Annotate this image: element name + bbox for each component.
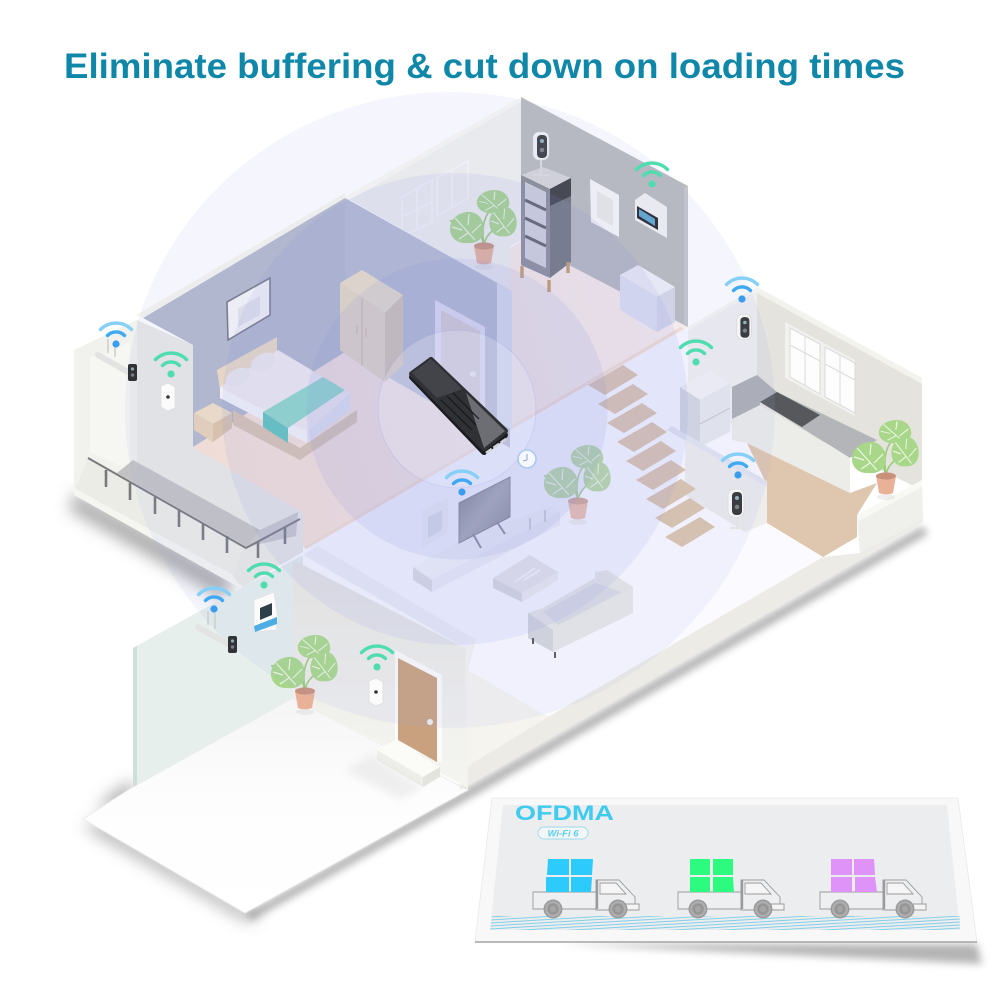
truck green: [678, 859, 784, 918]
outdoor camera left: [98, 339, 137, 381]
wifi adapter dongle: [412, 359, 506, 453]
wifi green left: [156, 353, 186, 378]
bed: [217, 337, 357, 460]
door step: [377, 740, 440, 787]
wifi blue lower: [198, 588, 230, 613]
picture on grey wall: [590, 179, 619, 237]
sofa: [528, 570, 633, 658]
outer circle: [125, 92, 775, 728]
signal coverage circles: [125, 92, 775, 728]
OFDMA card: [475, 798, 977, 959]
bedroom picture: [227, 278, 270, 340]
step shadow: [345, 752, 423, 800]
road stripes: [490, 916, 960, 930]
nightstand: [194, 403, 232, 442]
alarm panel: [635, 193, 667, 238]
kitchen counter: [732, 375, 877, 493]
kitchen divider wall: [667, 426, 767, 532]
staircase: [588, 365, 715, 547]
kitchen camera: [737, 314, 751, 340]
camera on shelf: [533, 132, 549, 175]
wall sensor left: [161, 383, 175, 411]
dongle glossy facet: [466, 393, 505, 448]
truck purple: [820, 859, 926, 918]
wifi green lower: [248, 564, 280, 589]
third circle: [307, 259, 607, 559]
front pier: [465, 640, 476, 790]
dongle grooves: [441, 393, 479, 430]
Wi-Fi 6 badge: Wi-Fi 6: [547, 828, 579, 840]
wifi green back: [636, 163, 668, 188]
plant living room: [544, 445, 611, 525]
white cabinet: [620, 265, 675, 332]
wifi blue kitchen: [726, 278, 758, 303]
truck blue: [533, 859, 639, 918]
dongle body: [412, 360, 505, 448]
card base: [475, 798, 977, 942]
front door: [395, 650, 442, 763]
ground shadows: [70, 492, 262, 920]
inner circle: [378, 330, 536, 488]
back-left wall with window: [345, 97, 523, 290]
kitchen walls: [688, 287, 922, 490]
plant back room: [450, 190, 517, 270]
wifi green entrance: [362, 646, 392, 671]
wifi blue tv: [446, 471, 478, 496]
card bottom edge: [475, 941, 977, 943]
plinth shadow: [245, 526, 928, 920]
ground slab: [83, 698, 468, 913]
wall below living floor: [468, 670, 548, 766]
tv: [459, 477, 510, 548]
outer plinth band: [460, 515, 923, 790]
wall picture living room: [422, 497, 448, 548]
wifi blue left: [100, 323, 132, 348]
left outer wall and balcony: [74, 320, 303, 588]
plant entrance: [271, 635, 338, 715]
wifi green fridge: [680, 341, 712, 366]
bedroom walls: [136, 193, 512, 448]
balcony railing: [88, 458, 300, 558]
living room floor: [305, 328, 823, 717]
shelf unit: [521, 167, 571, 292]
middle circle: [222, 173, 688, 645]
dongle top facet: [412, 359, 462, 398]
grey back wall: [521, 97, 688, 327]
lower right wall: [293, 560, 465, 786]
lower wall cap: [303, 546, 476, 648]
right pier: [857, 480, 923, 553]
router and sensors: [98, 314, 751, 706]
house model: [74, 97, 923, 913]
coffee table: [493, 555, 558, 602]
wardrobe: [340, 270, 403, 382]
living camera: [728, 489, 744, 528]
kitchen floor: [747, 443, 877, 557]
Wi-Fi 6 badge: [538, 827, 588, 840]
upper floor: [193, 240, 688, 548]
clock: [518, 450, 536, 468]
grey wall end cap: [684, 186, 688, 327]
tv console: [413, 505, 560, 592]
title: Eliminate buffering & cut down on loading times: [64, 47, 905, 86]
lower wall edge: [133, 646, 137, 787]
bedroom door: [435, 300, 485, 430]
floor boundary strip: [305, 328, 682, 548]
dongle end cap: [486, 439, 506, 453]
lower outdoor camera: [198, 611, 237, 653]
OFDMA card shadow: [560, 944, 982, 964]
OFDMA heading: OFDMA: [515, 802, 614, 825]
wifi blue divider: [722, 454, 754, 479]
plant kitchen: [852, 420, 919, 500]
lower alarm panel: [254, 592, 278, 632]
card inner panel: [490, 805, 960, 930]
dongle side edge: [412, 363, 505, 452]
entrance sensor: [369, 678, 383, 706]
lower back wall: [133, 555, 303, 787]
kitchen window: [785, 322, 855, 416]
wifi signal icons: [100, 163, 758, 671]
fridge: [680, 370, 730, 447]
